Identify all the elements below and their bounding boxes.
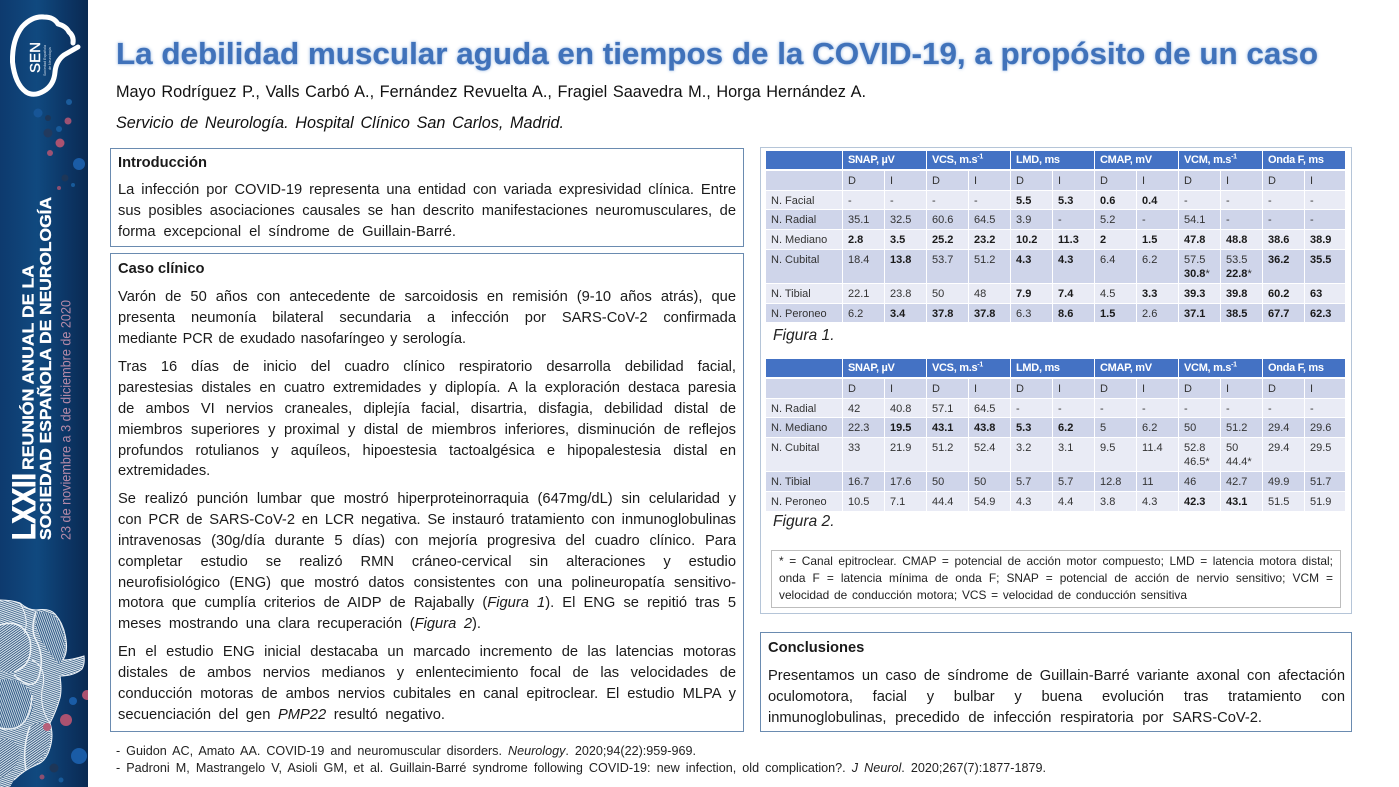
authors: Mayo Rodríguez P., Valls Carbó A., Fernández Revuelta A., Fragiel Saavedra M., Horga Hernández A. xyxy=(116,83,866,101)
table: figura 1: 2.6 xyxy=(1142,308,1157,320)
text block: caso clínico paragraph 2 xyxy=(118,359,736,479)
table: figura 1: 6.2 xyxy=(848,308,863,320)
table: figura 1: 48.8 xyxy=(1226,234,1247,246)
table: figura 1: 37.8 xyxy=(932,308,953,320)
table: figura 1: 50 xyxy=(932,288,944,300)
table: figura 2: 16.7 xyxy=(848,476,869,488)
table: figura 2: 29.4 xyxy=(1268,442,1289,454)
logo: SEN brain outline xyxy=(12,17,78,94)
table: figura 2: 50 xyxy=(974,476,986,488)
table: figura 2: 33 xyxy=(848,442,860,454)
table: figura 2: 50 xyxy=(1226,442,1238,454)
text block: caso clínico paragraph 2: extremidades. xyxy=(118,463,210,479)
table: figura 2: 5 xyxy=(1100,422,1106,434)
table: figura 1: I xyxy=(1310,175,1313,187)
table: figura 2: 51.5 xyxy=(1268,496,1289,508)
table: figura 2: 64.5 xyxy=(974,403,995,415)
table: figura 2: 46.5* xyxy=(1184,456,1210,468)
table: figura 2: 4.3 xyxy=(1016,496,1031,508)
text block: caso clínico paragraph 2: profundos rotulianos y aquíleos, hipoestesia tactoalgésica e hipopalestesia distal en xyxy=(118,443,736,459)
table: figura 2: N. Tibial xyxy=(771,476,811,488)
table: figura 2: 46 xyxy=(1184,476,1196,488)
table: figura 1: N. Cubital xyxy=(771,254,819,266)
table: figura 1: N. Peroneo xyxy=(771,308,827,320)
sidebar text: congress title: LXXII xyxy=(6,473,42,540)
text block: caso clínico paragraph 3: intravenosas (30g/día durante 5 días) con mejoría progresiva del cuadro clínico. Para xyxy=(118,533,736,549)
table: figura 2: 6.2 xyxy=(1142,422,1157,434)
table: figura 2: 12.8 xyxy=(1100,476,1121,488)
table: figura 1: - xyxy=(1268,195,1272,207)
heading: caso clínico: Caso clínico xyxy=(118,261,205,277)
table: figura 2: 52.4 xyxy=(974,442,995,454)
table: figura 2: 42 xyxy=(848,403,860,415)
text block: caso clínico paragraph 3: completar estudio se realizó RMN cráneo-cervical sin alteraciones y estudio xyxy=(118,554,736,570)
table: figura 1: 53.7 xyxy=(932,254,953,266)
table: figura 2: I xyxy=(1310,383,1313,395)
logo: SEN brain outline: Sociedad Española xyxy=(43,45,47,76)
table: figura 1: LMD, ms xyxy=(1016,154,1060,166)
table: figura 2: 40.8 xyxy=(890,403,911,415)
table: figura 2: 43.1 xyxy=(1226,496,1247,508)
text block: conclusiones: oculomotora, facial y bulbar y buena evolución tras tratamiento con xyxy=(768,689,1345,705)
table: figura 1: 62.3 xyxy=(1310,308,1331,320)
table: figura 1: 22.8* xyxy=(1226,268,1252,280)
table: figura 2: I xyxy=(1226,383,1229,395)
affiliation: Servicio de Neurología. Hospital Clínico San Carlos, Madrid. xyxy=(116,114,564,132)
table: figura 1: 35.1 xyxy=(848,214,869,226)
table: figura 1: 7.4 xyxy=(1058,288,1073,300)
table: figura 1: - xyxy=(1226,214,1230,226)
text block: caso clínico paragraph 4 xyxy=(118,644,736,723)
table: figura 1: 0.6 xyxy=(1100,195,1115,207)
table: figura 1: 6.4 xyxy=(1100,254,1115,266)
table: figura 2: 22.3 xyxy=(848,422,869,434)
table: figura 2: 43.1 xyxy=(932,422,953,434)
text block: caso clínico paragraph 3: Se realizó punción lumbar que mostró hiperproteinorraquia (647mg/dL) sin celularidad y xyxy=(118,491,736,507)
table: figura 1: 4.3 xyxy=(1016,254,1031,266)
table: figura 2: 50 xyxy=(1184,422,1196,434)
heading: conclusiones: Conclusiones xyxy=(768,640,864,656)
table: figura 1: 37.8 xyxy=(974,308,995,320)
table: figura 2: - xyxy=(1016,403,1020,415)
table: figura 2: 43.8 xyxy=(974,422,995,434)
table: figura 2: 10.5 xyxy=(848,496,869,508)
table: figura 1: 2 xyxy=(1100,234,1106,246)
table: figura 1: D xyxy=(1100,175,1108,187)
callout: abbreviations legend: onda F = latencia mínima de onda F; SNAP = potencial de acción de nervio sensitivo; VCM = xyxy=(779,571,1333,585)
table: figura 2: 42.7 xyxy=(1226,476,1247,488)
table: figura 2: N. Radial xyxy=(771,403,816,415)
table: figura 2: N. Peroneo xyxy=(771,496,827,508)
table: figura 1: 6.3 xyxy=(1016,308,1031,320)
table: figura 2: - xyxy=(1184,403,1188,415)
text block: introducción: La infección por COVID-19 representa una entidad con variada expresividad clínica. Entre xyxy=(118,182,736,198)
table: figura 1: D xyxy=(1016,175,1024,187)
table: figura 1: D xyxy=(1184,175,1192,187)
table: figura 2: 19.5 xyxy=(890,422,911,434)
references: - Guidon AC, Amato AA. COVID-19 and neuromuscular disorders. Neurology. 2020;94(22):959-969. xyxy=(116,744,696,758)
table: figura 1: 3.3 xyxy=(1142,288,1157,300)
logo: SEN brain outline: SEN xyxy=(27,42,44,73)
table: figura 2: D xyxy=(1016,383,1024,395)
table: figura 1: 54.1 xyxy=(1184,214,1205,226)
table: figura 2: I xyxy=(1058,383,1061,395)
table: figura 1: - xyxy=(1184,195,1188,207)
table: figura 2: I xyxy=(890,383,893,395)
table: figura 1: 51.2 xyxy=(974,254,995,266)
heading: introducción: Introducción xyxy=(118,155,207,171)
table: figura 1: 38.9 xyxy=(1310,234,1331,246)
text block: caso clínico paragraph 1: mediante PCR de exudado nasofaríngeo y serología. xyxy=(118,331,466,347)
text block: caso clínico paragraph 3 xyxy=(118,491,736,632)
table: figura 2: VCM, m.s-1 xyxy=(1184,361,1237,374)
table: figura 2: 4.4 xyxy=(1058,496,1073,508)
table: figura 1: 22.1 xyxy=(848,288,869,300)
table: figura 2: D xyxy=(1184,383,1192,395)
table: figura 1: 5.3 xyxy=(1058,195,1073,207)
table: figura 2: 3.8 xyxy=(1100,496,1115,508)
table: figura 2: - xyxy=(1142,403,1146,415)
table: figura 2: 44.4 xyxy=(932,496,953,508)
references xyxy=(116,744,1046,775)
table: figura 1: 8.6 xyxy=(1058,308,1073,320)
table: figura 1: 39.8 xyxy=(1226,288,1247,300)
table: figura 1: 60.6 xyxy=(932,214,953,226)
table: figura 1: 48 xyxy=(974,288,986,300)
text block: caso clínico paragraph 1: presenta neumonía bilateral secundaria a infección por SARS-CoV-2 confirmada xyxy=(118,310,736,326)
table: figura 1: 3.5 xyxy=(890,234,905,246)
sidebar text: congress title xyxy=(6,197,55,540)
table: figura 1: I xyxy=(890,175,893,187)
table: figura 1: 64.5 xyxy=(974,214,995,226)
table: figura 2: 3.2 xyxy=(1016,442,1031,454)
table: figura 1: 3.9 xyxy=(1016,214,1031,226)
text block: introducción: sus posibles asociaciones causales se han descrito manifestaciones neuromusculares, de xyxy=(118,203,736,219)
table: figura 2: 29.6 xyxy=(1310,422,1331,434)
table: figura 2: - xyxy=(1100,403,1104,415)
table: figura 1: 36.2 xyxy=(1268,254,1289,266)
table: figura 2: D xyxy=(848,383,856,395)
table: figura 2: D xyxy=(1268,383,1276,395)
table: figura 1: 60.2 xyxy=(1268,288,1289,300)
text block: caso clínico paragraph 4: conducción motoras de ambos nervios cubitales en canal epitroclear. El estudio MLPA y xyxy=(118,686,736,702)
table: figura 2: 51.2 xyxy=(932,442,953,454)
table: figura 2: 57.1 xyxy=(932,403,953,415)
table: figura 2: D xyxy=(1100,383,1108,395)
table: figura 1: - xyxy=(1268,214,1272,226)
table: figura 1: - xyxy=(1310,195,1314,207)
text block: caso clínico paragraph 3: con PCR de SARS-CoV-2 en LCR negativa. Se instauró tratamiento con inmunoglobulinas xyxy=(118,512,736,528)
text block: caso clínico paragraph 4: distales de ambos nervios medianos y enlentecimiento focal de las velocidades de xyxy=(118,665,736,681)
table: figura 1: - xyxy=(932,195,936,207)
table: figura 1: N. Mediano xyxy=(771,234,827,246)
table: figura 2: 51.7 xyxy=(1310,476,1331,488)
table: figura 1: I xyxy=(974,175,977,187)
panel: caso clínico xyxy=(110,253,744,732)
table: figura 2: 29.4 xyxy=(1268,422,1289,434)
table: figura 1: 37.1 xyxy=(1184,308,1205,320)
table: figura 2: 44.4* xyxy=(1226,456,1252,468)
illustration: wireframe brain xyxy=(0,600,84,787)
table: figura 2: VCS, m.s-1 xyxy=(932,361,983,374)
table: figura 2: 4.3 xyxy=(1142,496,1157,508)
table: figura 1: 39.3 xyxy=(1184,288,1205,300)
caption: figura 2: Figura 2. xyxy=(773,513,835,530)
table: figura 1: 11.3 xyxy=(1058,234,1079,246)
table: figura 2: 6.2 xyxy=(1058,422,1073,434)
table: figura 2: 3.1 xyxy=(1058,442,1073,454)
table: figura 2: N. Mediano xyxy=(771,422,827,434)
table: figura 2: 29.5 xyxy=(1310,442,1331,454)
table: figura 2: 52.8 xyxy=(1184,442,1205,454)
table: figura 1: 0.4 xyxy=(1142,195,1157,207)
table: figura 1: I xyxy=(1142,175,1145,187)
panel: conclusiones xyxy=(760,632,1352,732)
table: figura 1: 4.5 xyxy=(1100,288,1115,300)
table: figura 2: 5.7 xyxy=(1016,476,1031,488)
table: figura 2: D xyxy=(932,383,940,395)
decorative network dots, bottom xyxy=(40,690,92,782)
table: figura 1: 35.5 xyxy=(1310,254,1331,266)
table: figura 1: 6.2 xyxy=(1142,254,1157,266)
table: figura 1: I xyxy=(1226,175,1229,187)
table: figura 2: 51.2 xyxy=(1226,422,1247,434)
table: figura 1: 1.5 xyxy=(1142,234,1157,246)
table: figura 2: 51.9 xyxy=(1310,496,1331,508)
table: figura 1: 7.9 xyxy=(1016,288,1031,300)
table: figura 1: CMAP, mV xyxy=(1100,154,1152,166)
table: figura 1: 18.4 xyxy=(848,254,869,266)
table: figura 1: N. Tibial xyxy=(771,288,811,300)
table: figura 2: - xyxy=(1268,403,1272,415)
text block: caso clínico paragraph 4: En el estudio ENG inicial destacaba un marcado incremento de las latencias motoras xyxy=(118,644,736,660)
table: figura 2: 7.1 xyxy=(890,496,905,508)
table: figura 2: 5.3 xyxy=(1016,422,1031,434)
table: figura 2 xyxy=(766,359,1345,511)
table: figura 1: N. Radial xyxy=(771,214,816,226)
text block: caso clínico paragraph 2: Tras 16 días de inicio del cuadro clínico respiratorio desarrolla debilidad facial, xyxy=(118,359,736,375)
panel: figuras xyxy=(760,147,1352,614)
table: figura 1: - xyxy=(1058,214,1062,226)
table: figura 1: - xyxy=(848,195,852,207)
table: figura 2: 17.6 xyxy=(890,476,911,488)
text block: caso clínico paragraph 2: parestesias distales en cuatro extremidades y diplopía. A la exploración destaca paresia xyxy=(118,380,736,396)
callout: abbreviations legend: velocidad de conducción motora; VCS = velocidad de conducción sensitiva xyxy=(779,588,1187,602)
table: figura 2: Onda F, ms xyxy=(1268,362,1324,374)
table: figura 1: 5.2 xyxy=(1100,214,1115,226)
table: figura 1: - xyxy=(1142,214,1146,226)
table: figura 1: D xyxy=(932,175,940,187)
text block: introducción xyxy=(118,182,736,240)
table: figura 1: - xyxy=(974,195,978,207)
table: figura 1: N. Facial xyxy=(771,195,814,207)
table: figura 2: N. Cubital xyxy=(771,442,819,454)
sidebar text: dates: 23 de noviembre a 3 de diciembre de 2020 xyxy=(58,300,74,540)
table: figura 2: 42.3 xyxy=(1184,496,1205,508)
callout: abbreviations legend xyxy=(771,550,1341,608)
table: figura 1: 38.5 xyxy=(1226,308,1247,320)
text block: caso clínico paragraph 1: Varón de 50 años con antecedente de sarcoidosis en remisión (9-10 años atrás), que xyxy=(118,289,736,305)
table: figura 1: - xyxy=(890,195,894,207)
text block: caso clínico paragraph 1 xyxy=(118,289,736,347)
table: figura 1: 32.5 xyxy=(890,214,911,226)
text block: conclusiones: Presentamos un caso de síndrome de Guillain-Barré variante axonal con afectación xyxy=(768,668,1345,684)
table: figura 1: D xyxy=(848,175,856,187)
table: figura 1: SNAP, µV xyxy=(848,154,895,166)
table: figura 1: D xyxy=(1268,175,1276,187)
table: figura 2: 9.5 xyxy=(1100,442,1115,454)
table: figura 1: 1.5 xyxy=(1100,308,1115,320)
table: figura 1: 2.8 xyxy=(848,234,863,246)
panel: introducción xyxy=(110,148,744,247)
table: figura 2: SNAP, µV xyxy=(848,362,895,374)
title: La debilidad muscular aguda en tiempos de la COVID-19, a propósito de un caso xyxy=(116,36,1318,71)
table: figura 1: 25.2 xyxy=(932,234,953,246)
text block: caso clínico paragraph 4: secuenciación del gen PMP22 resultó negativo. xyxy=(118,707,445,723)
text block: caso clínico paragraph 2: miembros superiores y proximal y distal de miembros inferiores, disminución de reflejos xyxy=(118,422,736,438)
table: figura 1: 47.8 xyxy=(1184,234,1205,246)
table: figura 2: 21.9 xyxy=(890,442,911,454)
text block: conclusiones xyxy=(768,668,1345,726)
table: figura 2: LMD, ms xyxy=(1016,362,1060,374)
table: figura 1: 3.4 xyxy=(890,308,905,320)
table: figura 1 xyxy=(766,151,1345,322)
table: figura 1: - xyxy=(1226,195,1230,207)
table: figura 1: Onda F, ms xyxy=(1268,154,1324,166)
sidebar text: congress title: REUNIÓN ANUAL DE LA xyxy=(20,265,38,470)
table: figura 2: 49.9 xyxy=(1268,476,1289,488)
table: figura 1: VCS, m.s-1 xyxy=(932,153,983,166)
table: figura 2: CMAP, mV xyxy=(1100,362,1152,374)
table: figura 2: I xyxy=(974,383,977,395)
table: figura 1: I xyxy=(1058,175,1061,187)
table: figura 1: 13.8 xyxy=(890,254,911,266)
text block: caso clínico paragraph 3: neurofisiológico (ENG) que mostró datos consistentes con una polineuropatía sensitivo- xyxy=(118,575,736,591)
logo: SEN brain outline: de Neurología xyxy=(48,47,52,70)
table: figura 1: 23.8 xyxy=(890,288,911,300)
table: figura 1: 67.7 xyxy=(1268,308,1289,320)
table: figura 2: 11.4 xyxy=(1142,442,1163,454)
text block: conclusiones: inmunoglobulinas, precedido de infección respiratoria por SARS-CoV-2. xyxy=(768,710,1262,726)
table: figura 1: 4.3 xyxy=(1058,254,1073,266)
table: figura 1: 57.5 xyxy=(1184,254,1205,266)
text block: caso clínico paragraph 3: motora que cumplía criterios de AIDP de Rajabally (Figura 1). El ENG se repitió tras 5 xyxy=(118,595,736,611)
caption: figura 1: Figura 1. xyxy=(773,327,835,344)
table: figura 1: VCM, m.s-1 xyxy=(1184,153,1237,166)
table: figura 1: 30.8* xyxy=(1184,268,1210,280)
table: figura 1: 63 xyxy=(1310,288,1322,300)
sidebar text: congress title: SOCIEDAD ESPAÑOLA DE NEUROLOGÍA xyxy=(37,197,55,540)
text block: introducción: forma excepcional el síndrome de Guillain-Barré. xyxy=(118,224,456,240)
table: figura 2: - xyxy=(1058,403,1062,415)
callout: abbreviations legend: * = Canal epitroclear. CMAP = potencial de acción motor compuesto; LMD = latencia motora distal; xyxy=(779,554,1333,568)
table: figura 2: 50 xyxy=(932,476,944,488)
table: figura 2: 5.7 xyxy=(1058,476,1073,488)
table: figura 1: 38.6 xyxy=(1268,234,1289,246)
decorative network dots, top xyxy=(34,99,85,190)
table: figura 2: - xyxy=(1226,403,1230,415)
text block: caso clínico paragraph 3: meses mostrando una clara recuperación (Figura 2). xyxy=(118,616,481,632)
table: figura 1: - xyxy=(1310,214,1314,226)
table: figura 1: 10.2 xyxy=(1016,234,1037,246)
references: - Padroni M, Mastrangelo V, Asioli GM, et al. Guillain-Barré syndrome following COVID-19: new infection, old complication?. J Neurol. 2020;267(7):1877-1879. xyxy=(116,761,1046,775)
table: figura 1: 5.5 xyxy=(1016,195,1031,207)
text block: caso clínico paragraph 2: de ambos VI nervios craneales, diplejía facial, disartria, disfagia, debilidad distal de xyxy=(118,401,736,417)
table: figura 2: 54.9 xyxy=(974,496,995,508)
sidebar: conference banner xyxy=(0,0,88,787)
table: figura 1: 23.2 xyxy=(974,234,995,246)
table: figura 2: I xyxy=(1142,383,1145,395)
table: figura 2: - xyxy=(1310,403,1314,415)
table: figura 2: 11 xyxy=(1142,476,1153,488)
table: figura 1: 53.5 xyxy=(1226,254,1247,266)
